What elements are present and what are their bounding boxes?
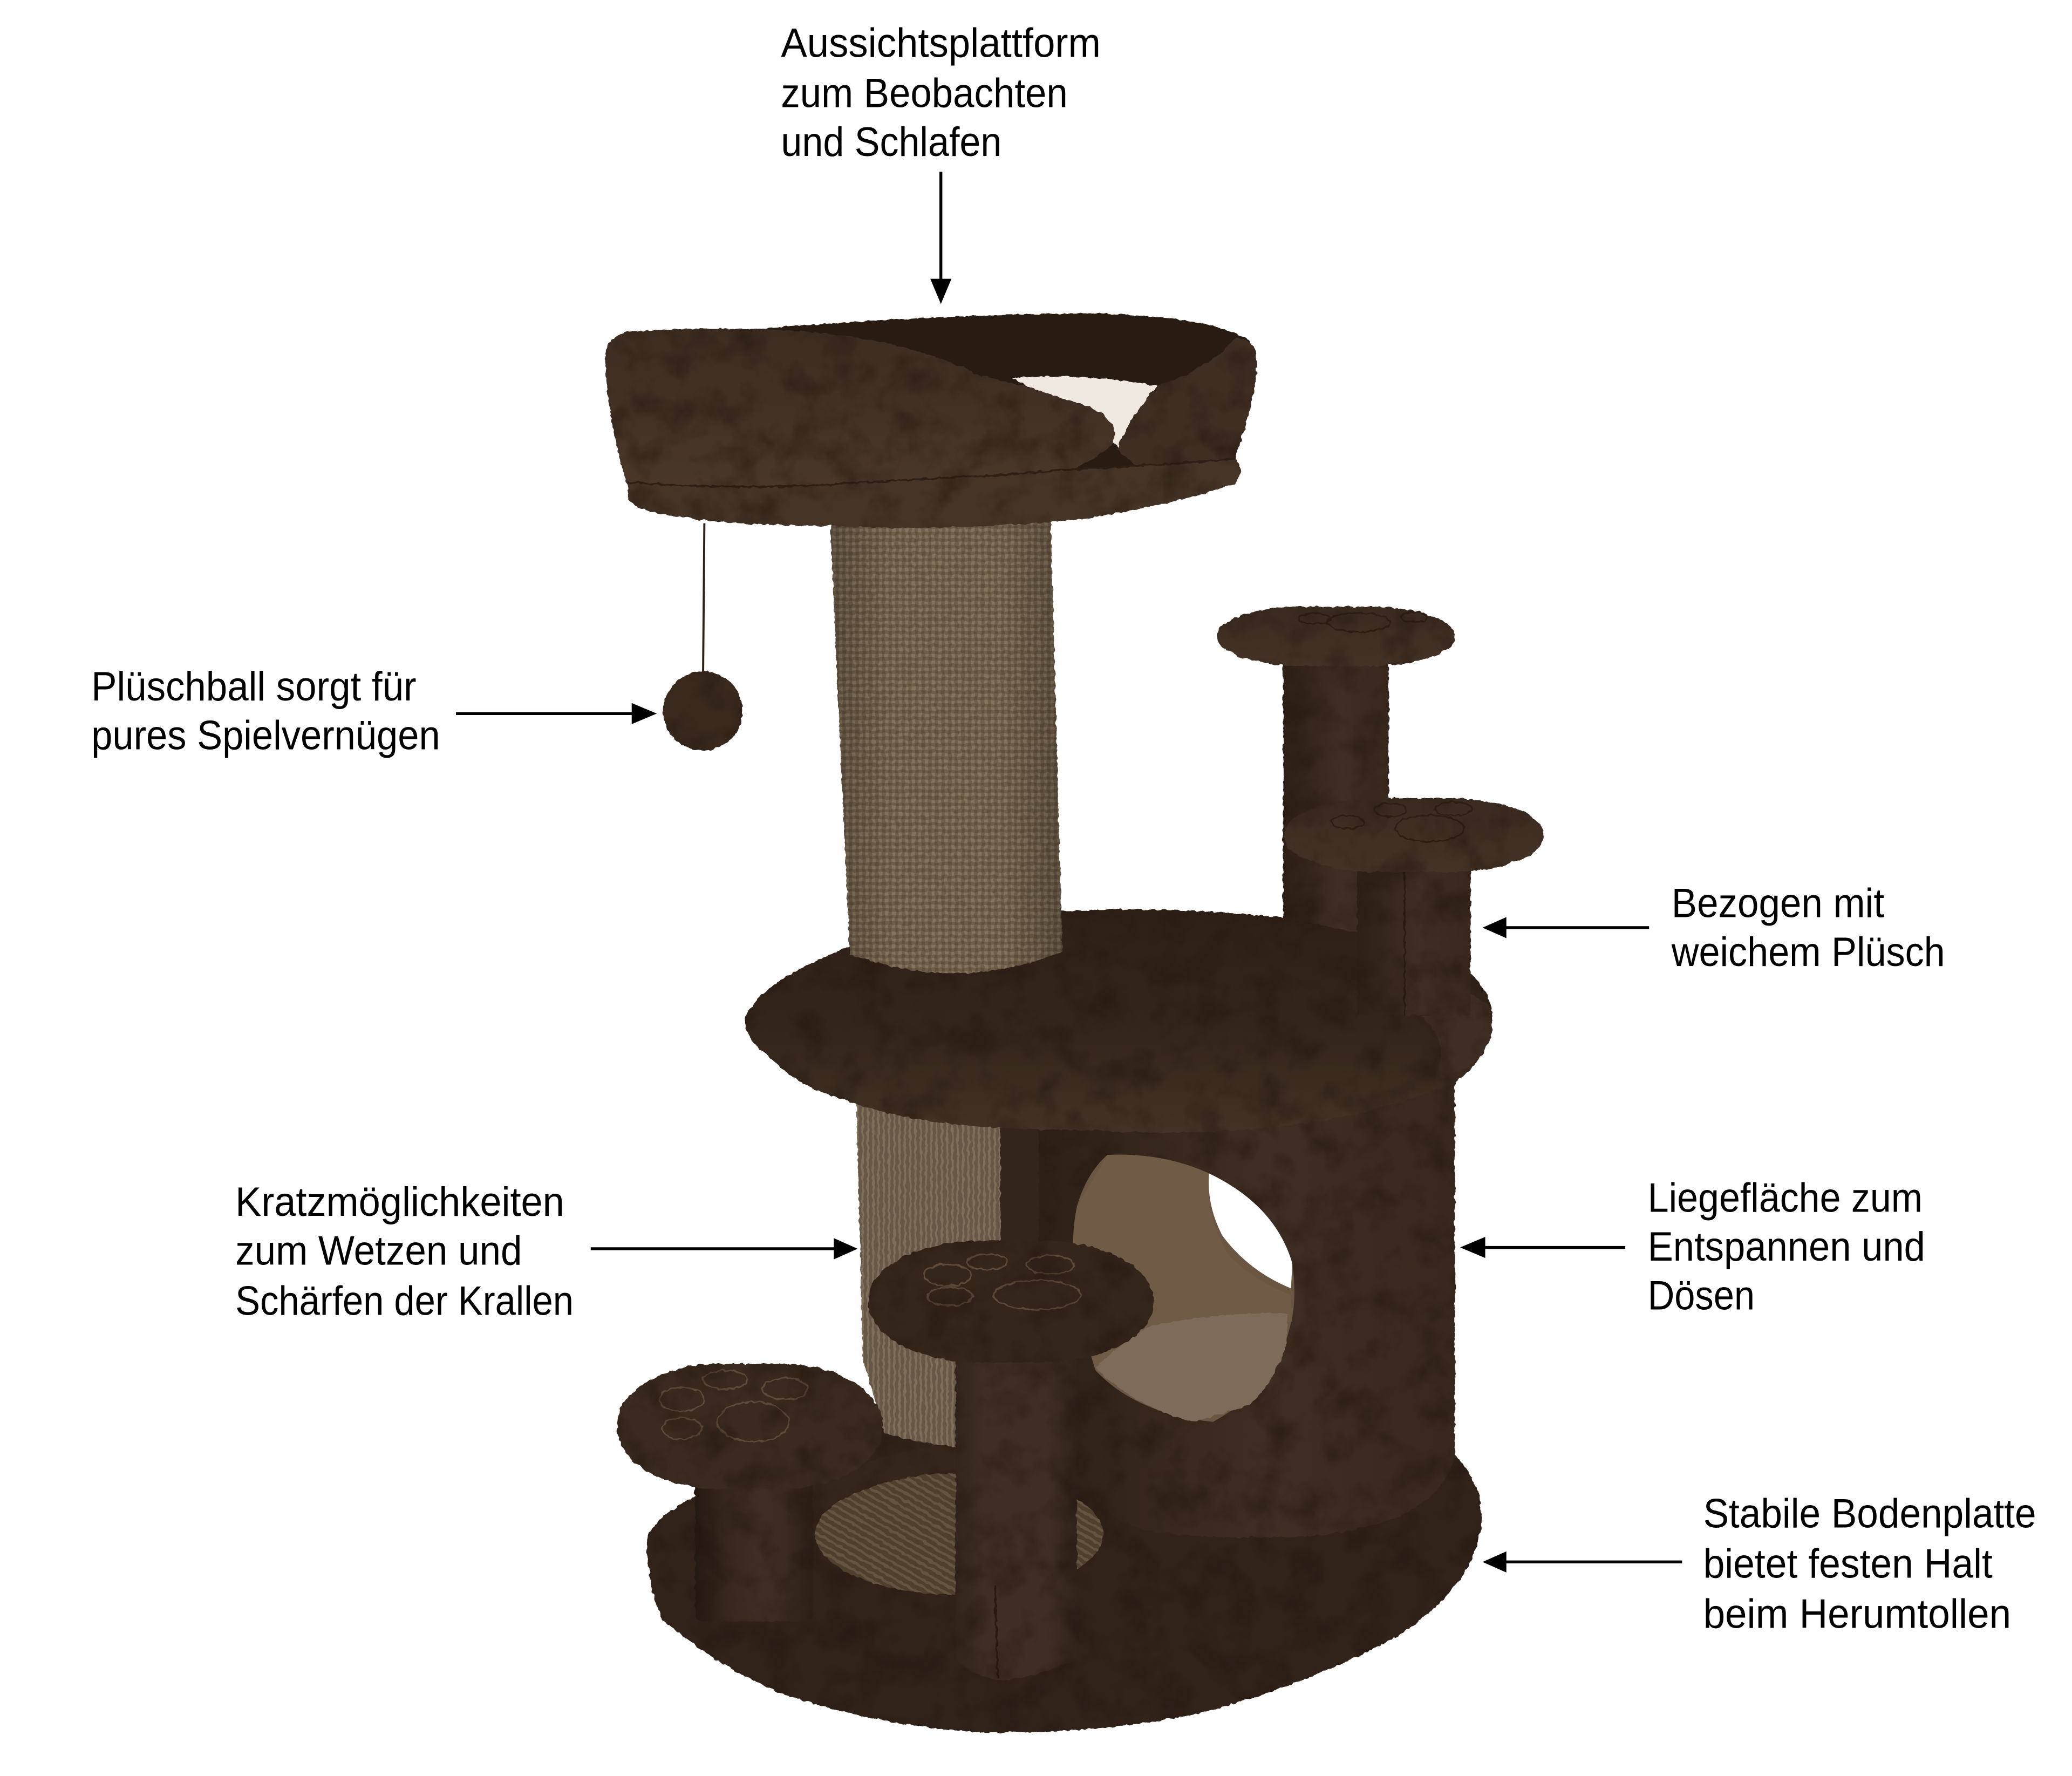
arrow: right to sisal post: [591, 1238, 857, 1260]
bed front left wall: [605, 329, 1115, 486]
arrow: down to platform: [930, 172, 951, 304]
paw engraving: [1332, 802, 1472, 842]
tall back post: [1283, 654, 1389, 958]
base sisal mat: [815, 1473, 1103, 1595]
arrow: left to base plate: [1483, 1552, 1682, 1573]
right front paw pad: [868, 1241, 1154, 1363]
callout: Kratzmöglichkeiten: Kratzmöglichkeiten: [235, 1179, 564, 1225]
callout: Bezogen mit weichem Plüsch: Bezogen mit: [1672, 880, 1884, 926]
right front post: [956, 1348, 1077, 1681]
observation bed: [605, 313, 1257, 528]
paw engraving: [659, 1370, 807, 1441]
plush toy ball: [663, 671, 742, 751]
callout: Plüschball: Plüschball sorgt für: [91, 664, 417, 710]
callout: Aussichtsplattform: Aussichtsplattform: [781, 20, 1101, 66]
callout: Stabile Bodenplatte: beim Herumtollen: [1703, 1591, 2011, 1637]
callout: Stabile Bodenplatte: Stabile Bodenplatte: [1703, 1491, 2036, 1537]
arrow: left to cylinder: [1460, 1237, 1625, 1258]
left pad post: [695, 1460, 813, 1622]
second back pad post: [1357, 859, 1471, 1015]
callout: Liegefläche: Entspannen und: [1648, 1224, 1925, 1270]
left paw pad: [617, 1364, 883, 1489]
callout: Plüschball: [91, 664, 657, 758]
second paw pad: [1284, 798, 1543, 872]
arrow: right to ball: [456, 703, 657, 724]
see-through opening: [1209, 1173, 1292, 1288]
cave back wall: [1073, 1155, 1292, 1370]
callout: Stabile Bodenplatte: [1483, 1491, 2036, 1637]
arrow: left to post: [1483, 917, 1649, 938]
base plate: [646, 1420, 1482, 1732]
plush strip beside sisal: [809, 1443, 957, 1520]
bed back wall: [740, 313, 1257, 476]
cave interior: [1073, 1155, 1294, 1422]
callout: Plüschball: pures Spielvernügen: [91, 712, 440, 758]
top paw pad: [1217, 607, 1455, 666]
callout: Bezogen mit weichem Plüsch: [1483, 880, 1945, 975]
lower sisal post: [856, 1104, 1044, 1454]
paw engraving: [1299, 612, 1427, 631]
callout: Kratzmöglichkeiten: zum Wetzen und: [235, 1228, 522, 1274]
callout: Aussichtsplattform: zum Beobachten: [781, 70, 1068, 116]
callout: Liegefläche: Liegefläche zum: [1648, 1175, 1923, 1221]
cave cushion: [1095, 1313, 1287, 1422]
bed front right wall: [1116, 337, 1257, 489]
bed cushion: [1012, 377, 1157, 456]
callout: Kratzmöglichkeiten: [235, 1179, 857, 1324]
paw engraving: [924, 1254, 1081, 1310]
callout: Bezogen mit weichem Plüsch: weichem Plüsch: [1671, 929, 1945, 975]
callout: Aussichtsplattform: [781, 20, 1101, 304]
string of toy ball: [703, 523, 704, 681]
upper sisal post: [830, 515, 1062, 973]
callout: Liegefläche: [1460, 1175, 1925, 1319]
lower cylinder with hole: [1039, 1077, 1455, 1537]
middle platform: [745, 909, 1492, 1133]
callout: Liegefläche: Dösen: [1648, 1273, 1755, 1319]
callout: Aussichtsplattform: und Schlafen: [781, 119, 1001, 165]
bed bottom rim: [628, 459, 1241, 528]
callout: Kratzmöglichkeiten: Schärfen der Krallen: [235, 1278, 574, 1324]
callout: Stabile Bodenplatte: bietet festen Halt: [1703, 1541, 1993, 1587]
photo: cat scratching tree: [605, 313, 1543, 1732]
